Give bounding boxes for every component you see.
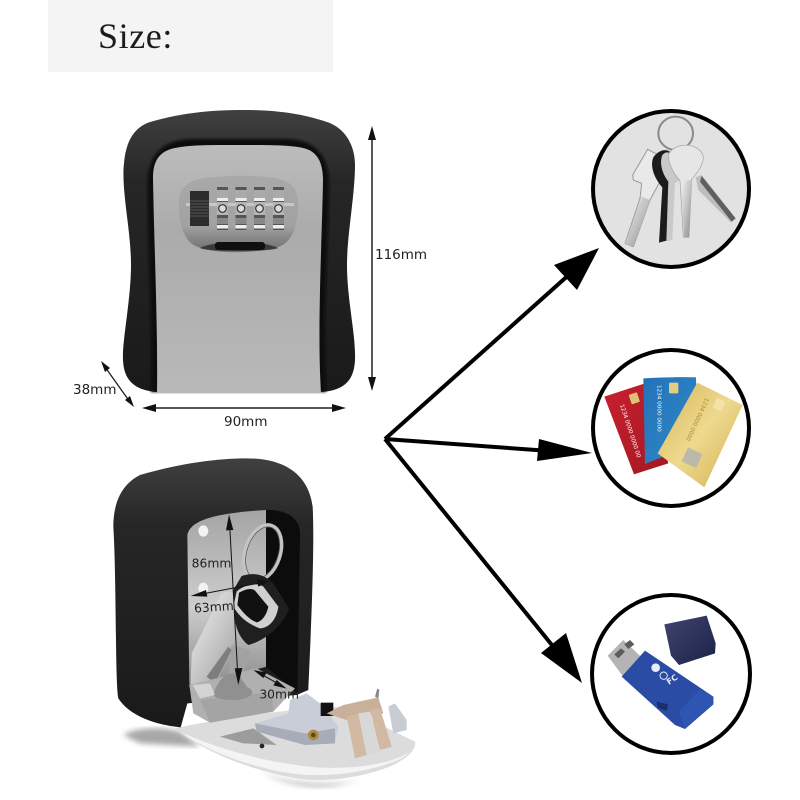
mounting holes (198, 525, 208, 537)
key: left long (625, 149, 662, 247)
gray front panel (153, 145, 323, 393)
keys (191, 592, 247, 696)
key: centre right (668, 145, 703, 237)
dimension: height 116mm: 116mm (375, 247, 427, 263)
key ring (237, 520, 288, 585)
key: dark centre (652, 150, 680, 243)
title: Size: Size: (98, 16, 173, 56)
slider (190, 191, 209, 226)
lock box open view (113, 458, 415, 788)
USB cap (664, 616, 716, 665)
dimension: 30mm (253, 670, 299, 702)
circle: keys (593, 111, 749, 267)
black rubber cover (123, 110, 355, 392)
gold card: 1234 0000 0000 (684, 396, 709, 442)
handle (200, 242, 278, 251)
dark inner side wall (266, 510, 300, 693)
dimension: 30mm: 30mm (259, 688, 299, 702)
circle: bank cards (593, 350, 749, 506)
metal springs (327, 697, 383, 720)
circle: USB drive: FC (665, 673, 680, 687)
USB logos (651, 663, 660, 672)
circle: USB drive (592, 595, 750, 753)
USB body (622, 651, 713, 729)
dimension: 63mm: 63mm (194, 599, 234, 616)
lock box front view (123, 110, 355, 393)
dimension: 63mm (191, 579, 271, 616)
dimension: 86mm (192, 514, 242, 685)
key fob (233, 574, 289, 645)
USB connector (608, 640, 643, 676)
arrows to contents (385, 248, 599, 683)
latch block (255, 693, 338, 745)
dimension: depth 38mm (73, 361, 134, 407)
arrow to USB (385, 439, 582, 683)
open lid (175, 707, 415, 780)
key ring (658, 117, 693, 150)
dial recess (179, 176, 298, 252)
key: right (696, 175, 736, 223)
arrow to cards (385, 439, 592, 461)
black cover (113, 458, 313, 727)
shadow under lid (123, 728, 200, 747)
dimension: 86mm: 86mm (192, 557, 231, 571)
blue card: 1234 0000 0000 (656, 385, 662, 432)
red card: 1234 0000 0000 00 (618, 404, 641, 459)
dimension: width 90mm: 90mm (224, 414, 267, 430)
dimension: height 116mm (368, 126, 427, 391)
dimension: width 90mm (142, 404, 346, 430)
combination dials (217, 187, 284, 230)
dimension: depth 38mm: 38mm (73, 382, 116, 398)
arrow to keys (385, 248, 599, 439)
floor with peg and hinge (189, 668, 295, 723)
back wall (187, 510, 267, 687)
title box (48, 0, 333, 72)
